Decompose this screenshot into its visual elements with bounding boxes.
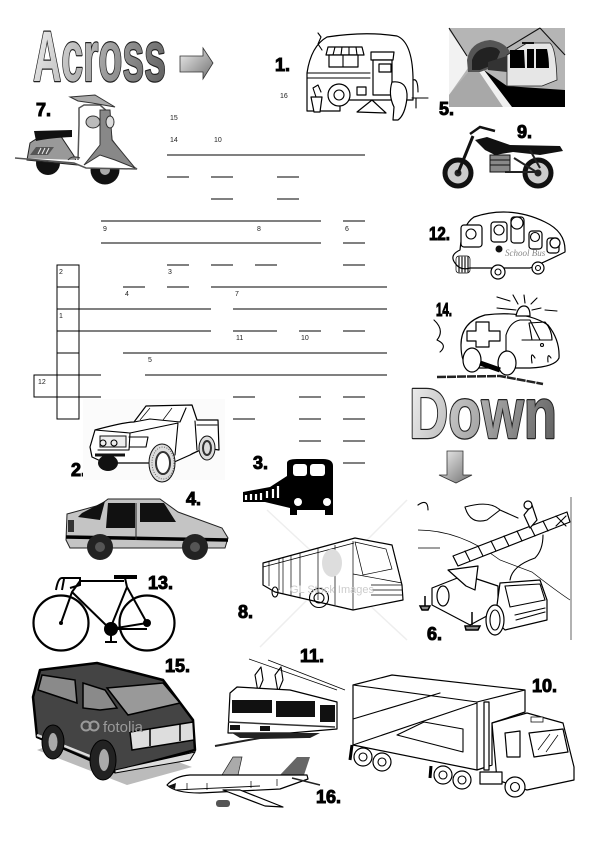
number: 12: 12. <box>429 224 450 244</box>
clue numbers: 2 <box>59 269 63 276</box>
icon: ambulance <box>434 295 559 384</box>
icon: airplane <box>167 757 320 807</box>
number: 4: 4. <box>186 489 201 509</box>
clue numbers: 15 <box>170 115 178 122</box>
number: 7: 7. <box>36 100 51 120</box>
icon: scooter <box>15 95 137 184</box>
clue numbers: 10 <box>301 335 309 342</box>
clue numbers: 4 <box>125 291 129 298</box>
clue numbers: 9 <box>103 226 107 233</box>
number: 5: 5. <box>439 99 454 119</box>
icon: train on bridge <box>243 459 333 515</box>
icon: van with shadow: fotolia <box>103 719 144 736</box>
clue numbers: 11 <box>236 335 243 342</box>
number: 13: 13. <box>148 573 173 593</box>
crossword grid <box>34 93 387 463</box>
number: 2: 2. <box>71 460 86 480</box>
image: subway train in tunnel <box>449 28 565 107</box>
icon: tram <box>215 659 345 746</box>
icon: coach bus: GL Stock Images <box>290 584 374 596</box>
clue numbers: 6 <box>345 226 349 233</box>
icon: fire engine <box>418 497 571 640</box>
heading: Across: Across <box>33 18 166 97</box>
clue numbers: 5 <box>148 357 152 364</box>
number: 14: 14. <box>436 300 452 320</box>
icon: school bus: School Bus <box>505 248 546 258</box>
clue numbers: 7 <box>235 291 239 298</box>
clue numbers: 1 <box>59 313 63 320</box>
icon: motorcycle <box>445 127 563 186</box>
icon: pickup truck <box>83 399 225 482</box>
icon: school bus <box>453 212 565 279</box>
icon: van with shadow <box>33 663 195 785</box>
number: 15: 15. <box>165 656 190 676</box>
clue numbers: 3 <box>168 269 172 276</box>
clue numbers <box>38 93 349 386</box>
clue numbers: 8 <box>257 226 261 233</box>
number: 9: 9. <box>517 122 532 142</box>
icon: box truck <box>350 675 574 797</box>
number: 11: 11. <box>300 646 324 666</box>
clue numbers: 12 <box>38 379 46 386</box>
number: 16: 16. <box>316 787 341 807</box>
icon: caravan <box>307 33 428 120</box>
watermark lines <box>260 500 407 647</box>
clue numbers: 10 <box>214 137 222 144</box>
clue numbers: 16 <box>280 93 288 100</box>
number: 8: 8. <box>238 602 253 622</box>
number: 3: 3. <box>253 453 268 473</box>
icon: coach bus <box>263 538 403 610</box>
number: 10: 10. <box>532 676 557 696</box>
arrow: right <box>180 48 213 79</box>
number: 6: 6. <box>427 624 442 644</box>
number: 1: 1. <box>275 55 290 75</box>
arrow: down <box>439 451 472 483</box>
clue numbers: 14 <box>170 137 178 144</box>
icon: bicycle <box>34 577 174 650</box>
icon: sedan car <box>66 499 228 560</box>
